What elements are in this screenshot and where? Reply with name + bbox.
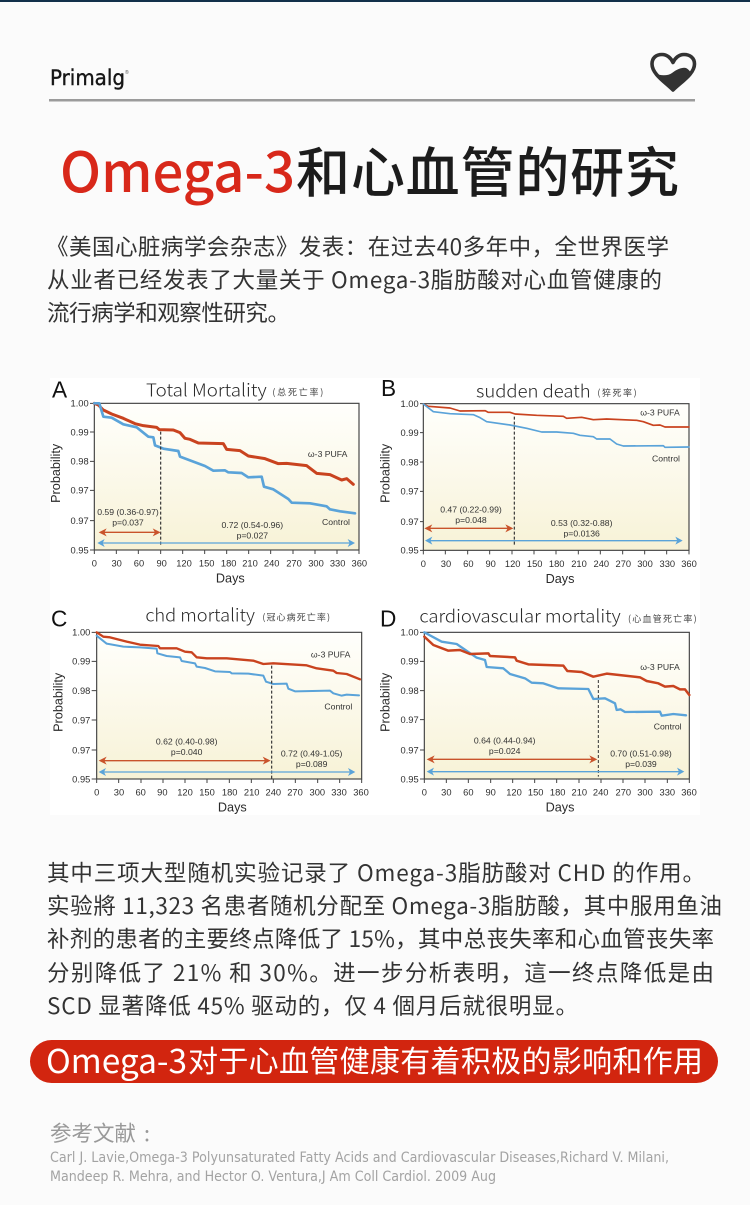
chart B: sudden death: 0.99 bbox=[401, 428, 419, 438]
intro paragraph: 从业者已经发表了大量关于 Omega-3脂肪酸对心血管健康的 bbox=[47, 263, 662, 295]
chart D: cardiovascular mortality: D bbox=[380, 606, 396, 632]
chart C: chd mortality: 30 bbox=[114, 788, 124, 798]
chart A: total mortality: 270 bbox=[286, 558, 302, 568]
chart C: chd mortality: ω-3 PUFA bbox=[311, 649, 351, 659]
chart C: chd mortality: Control bbox=[324, 702, 352, 712]
chart D: cardiovascular mortality: 0.99 bbox=[401, 657, 419, 667]
top image strip bbox=[0, 0, 750, 2]
chart D: cardiovascular mortality: 0 bbox=[422, 788, 427, 798]
chart C: chd mortality: p=0.040 bbox=[171, 747, 203, 757]
chart C: chd mortality: chd mortality bbox=[145, 603, 255, 628]
chart A: total mortality: 30 bbox=[111, 558, 122, 568]
chart B: sudden death: 0.47 (0.22-0.99) bbox=[440, 504, 502, 514]
chart A: total mortality: p=0.027 bbox=[237, 531, 268, 541]
header rule bbox=[49, 99, 695, 102]
chart C: chd mortality: 300 bbox=[310, 788, 325, 798]
chart C: chd mortality: 0.97 bbox=[72, 715, 90, 725]
chart D: cardiovascular mortality: p=0.024 bbox=[489, 746, 521, 756]
chart D: cardiovascular mortality: 0.70 (0.51-0.98) bbox=[610, 748, 672, 758]
chart B: sudden death: 0.53 (0.32-0.88) bbox=[551, 518, 613, 528]
chart A: total mortality: (总死亡率) bbox=[272, 385, 323, 398]
chart C: chd mortality: Days bbox=[218, 800, 247, 814]
icon: heart with wave bbox=[652, 54, 694, 90]
chart A: total mortality: 60 bbox=[134, 558, 144, 568]
chart B: sudden death: 330 bbox=[660, 559, 675, 569]
chart B: sudden death: 0.97 bbox=[401, 487, 419, 497]
chart B: sudden death: 0 bbox=[421, 559, 426, 569]
chart C: chd mortality: 120 bbox=[177, 788, 193, 798]
chart B: sudden death: sudden death bbox=[476, 379, 591, 404]
chart A: total mortality: 180 bbox=[221, 558, 236, 568]
chart A: total mortality: 150 bbox=[199, 558, 214, 568]
callout banner: 对于心血管健康有着积极的影响和作用 bbox=[188, 1037, 703, 1081]
chart C: chd mortality: 0.95 bbox=[72, 774, 90, 784]
chart B: sudden death: Control bbox=[652, 453, 680, 463]
chart B: sudden death: 0.97 bbox=[401, 517, 419, 527]
chart B: sudden death: 210 bbox=[571, 559, 587, 569]
chart A: total mortality: 0.98 bbox=[71, 457, 89, 467]
chart D: cardiovascular mortality: 0.97 bbox=[401, 745, 419, 755]
chart D: cardiovascular mortality: 210 bbox=[572, 788, 587, 798]
chart B: sudden death: 300 bbox=[637, 559, 653, 569]
chart B: sudden death: 60 bbox=[463, 559, 474, 569]
chart B: sudden death: ω-3 PUFA bbox=[640, 407, 680, 417]
chart C: chd mortality: 360 bbox=[353, 788, 369, 798]
references: Carl J. Lavie,Omega-3 Polyunsaturated Fatty Acids and Cardiovascular Diseases,Richard V. Milani, bbox=[50, 1150, 669, 1166]
chart B: sudden death bbox=[379, 375, 697, 586]
findings paragraph: 实验將 11,323 名患者随机分配至 Omega-3脂肪酸，其中服用鱼油 bbox=[47, 889, 722, 921]
chart B: sudden death: 150 bbox=[527, 559, 542, 569]
chart C: chd mortality: 0.72 (0.49-1.05) bbox=[281, 748, 343, 758]
references bbox=[50, 1117, 669, 1185]
chart B: sudden death: 180 bbox=[549, 559, 564, 569]
chart C: chd mortality: 0 bbox=[94, 788, 99, 798]
chart D: cardiovascular mortality: Days bbox=[546, 800, 574, 814]
chart A: total mortality: A bbox=[52, 376, 68, 402]
chart B: sudden death: 270 bbox=[616, 559, 631, 569]
chart D: cardiovascular mortality: 90 bbox=[485, 788, 496, 798]
chart B: sudden death: (猝死率) bbox=[597, 386, 637, 399]
findings paragraph: 补剂的患者的主要终点降低了 15%，其中总丧失率和心血管丧失率 bbox=[47, 922, 714, 954]
chart A: total mortality: 330 bbox=[330, 558, 345, 568]
chart A: total mortality: 210 bbox=[242, 558, 258, 568]
chart B: sudden death: Days bbox=[546, 572, 574, 586]
chart C: chd mortality: 270 bbox=[287, 788, 303, 798]
chart D: cardiovascular mortality: 0.98 bbox=[401, 686, 419, 696]
findings paragraph: 其中三项大型随机实验记录了 Omega-3脂肪酸对 CHD 的作用。 bbox=[47, 856, 705, 888]
chart D: cardiovascular mortality: 30 bbox=[441, 788, 452, 798]
chart C: chd mortality: 60 bbox=[135, 788, 146, 798]
chart D: cardiovascular mortality: Control bbox=[654, 721, 682, 731]
chart B: sudden death: 30 bbox=[441, 559, 451, 569]
chart C: chd mortality: 240 bbox=[266, 788, 281, 798]
chart C: chd mortality: 210 bbox=[244, 788, 259, 798]
references: Mandeep R. Mehra, and Hector O. Ventura,J Am Coll Cardiol. 2009 Aug bbox=[50, 1169, 496, 1185]
chart C: chd mortality: 0.99 bbox=[72, 657, 90, 667]
chart A: total mortality: 0.97 bbox=[71, 486, 89, 496]
brand logo: Primalg: ® bbox=[125, 69, 129, 76]
findings paragraph bbox=[47, 856, 722, 1021]
chart A: total mortality: 0.95 bbox=[71, 545, 89, 555]
chart A: total mortality: 360 bbox=[352, 558, 367, 568]
chart C: chd mortality: 0.62 (0.40-0.98) bbox=[156, 736, 218, 746]
chart B: sudden death: p=0.0136 bbox=[563, 529, 600, 539]
chart B: sudden death: p=0.048 bbox=[455, 515, 487, 525]
chart D: cardiovascular mortality: 180 bbox=[550, 788, 565, 798]
chart A: total mortality: 0.97 bbox=[71, 516, 89, 526]
title: 和心血管的研究 bbox=[296, 129, 679, 208]
chart A: total mortality bbox=[49, 376, 367, 585]
chart B: sudden death: B bbox=[381, 375, 396, 401]
chart A: total mortality: ω-3 PUFA bbox=[308, 449, 348, 459]
intro paragraph: 流行病学和观察性研究。 bbox=[47, 296, 290, 328]
chart A: total mortality: 0.99 bbox=[71, 427, 89, 437]
findings paragraph: SCD 显著降低 45% 驱动的，仅 4 個月后就很明显。 bbox=[47, 989, 578, 1021]
chart C: chd mortality: 1.00 bbox=[72, 628, 90, 638]
brand logo: Primalg: Primalg bbox=[50, 66, 125, 90]
findings paragraph: 分别降低了 21% 和 30%。进一步分析表明，這一终点降低是由 bbox=[47, 956, 714, 988]
chart A: total mortality: Probability bbox=[49, 443, 63, 503]
chart C: chd mortality bbox=[51, 603, 369, 814]
chart C: chd mortality: 0.97 bbox=[72, 745, 90, 755]
chart A: total mortality: 1.00 bbox=[71, 399, 89, 409]
chart D: cardiovascular mortality: (心血管死亡率) bbox=[628, 612, 697, 625]
chart B: sudden death: Probability bbox=[379, 443, 393, 503]
chart D: cardiovascular mortality: 1.00 bbox=[401, 628, 419, 638]
chart D: cardiovascular mortality: 0.97 bbox=[401, 715, 419, 725]
chart C: chd mortality: C bbox=[51, 606, 67, 632]
chart C: chd mortality: (冠心病死亡率) bbox=[262, 611, 330, 624]
callout banner bbox=[30, 1035, 718, 1083]
chart D: cardiovascular mortality: 0.95 bbox=[401, 774, 419, 784]
chart A: total mortality: Total Mortality bbox=[146, 378, 267, 403]
chart C: chd mortality: 90 bbox=[157, 788, 168, 798]
chart B: sudden death: 0.95 bbox=[401, 546, 419, 556]
chart A: total mortality: 300 bbox=[308, 558, 324, 568]
chart D: cardiovascular mortality: cardiovascular mortality bbox=[419, 604, 621, 629]
panel: four survival charts bbox=[49, 375, 700, 815]
chart A: total mortality: 0.59 (0.36-0.97) bbox=[97, 507, 159, 517]
chart D: cardiovascular mortality: 360 bbox=[681, 788, 697, 798]
chart B: sudden death: 90 bbox=[485, 559, 496, 569]
chart D: cardiovascular mortality: 60 bbox=[463, 788, 474, 798]
title bbox=[60, 128, 679, 208]
chart A: total mortality: 0 bbox=[92, 558, 97, 568]
chart C: chd mortality: p=0.089 bbox=[296, 759, 328, 769]
chart B: sudden death: 0.98 bbox=[401, 457, 419, 467]
chart C: chd mortality: 330 bbox=[331, 788, 347, 798]
chart D: cardiovascular mortality: Probability bbox=[379, 672, 393, 732]
chart C: chd mortality: 180 bbox=[222, 788, 237, 798]
chart C: chd mortality: Probability bbox=[51, 672, 65, 732]
references: : bbox=[144, 1117, 150, 1148]
chart D: cardiovascular mortality: p=0.039 bbox=[625, 759, 657, 769]
chart D: cardiovascular mortality: 270 bbox=[616, 788, 631, 798]
chart A: total mortality: 90 bbox=[156, 558, 167, 568]
chart B: sudden death: 360 bbox=[681, 559, 697, 569]
chart D: cardiovascular mortality bbox=[379, 604, 697, 814]
chart D: cardiovascular mortality: 330 bbox=[660, 788, 675, 798]
chart A: total mortality: Control bbox=[322, 517, 350, 527]
chart B: sudden death: 1.00 bbox=[401, 399, 419, 409]
chart B: sudden death: 120 bbox=[505, 559, 520, 569]
chart A: total mortality: 240 bbox=[264, 558, 279, 568]
title: Omega-3 bbox=[60, 128, 295, 208]
intro paragraph: 《美国心脏病学会杂志》发表：在过去40多年中，全世界医学 bbox=[46, 230, 669, 262]
chart D: cardiovascular mortality: 240 bbox=[593, 788, 608, 798]
chart A: total mortality: 0.72 (0.54-0.96) bbox=[222, 520, 283, 530]
chart A: total mortality: Days bbox=[216, 571, 245, 585]
intro paragraph bbox=[46, 230, 669, 328]
chart D: cardiovascular mortality: 150 bbox=[528, 788, 543, 798]
chart D: cardiovascular mortality: 120 bbox=[506, 788, 522, 798]
chart D: cardiovascular mortality: 0.64 (0.44-0.94) bbox=[474, 735, 536, 745]
chart D: cardiovascular mortality: ω-3 PUFA bbox=[640, 662, 680, 672]
chart C: chd mortality: 0.98 bbox=[72, 686, 90, 696]
chart B: sudden death: 240 bbox=[594, 559, 609, 569]
chart C: chd mortality: 150 bbox=[199, 788, 215, 798]
references: 参考文献 bbox=[50, 1117, 136, 1148]
callout banner: Omega-3 bbox=[46, 1035, 187, 1083]
chart D: cardiovascular mortality: 300 bbox=[637, 788, 653, 798]
chart A: total mortality: 120 bbox=[176, 558, 192, 568]
chart A: total mortality: p=0.037 bbox=[112, 518, 144, 528]
